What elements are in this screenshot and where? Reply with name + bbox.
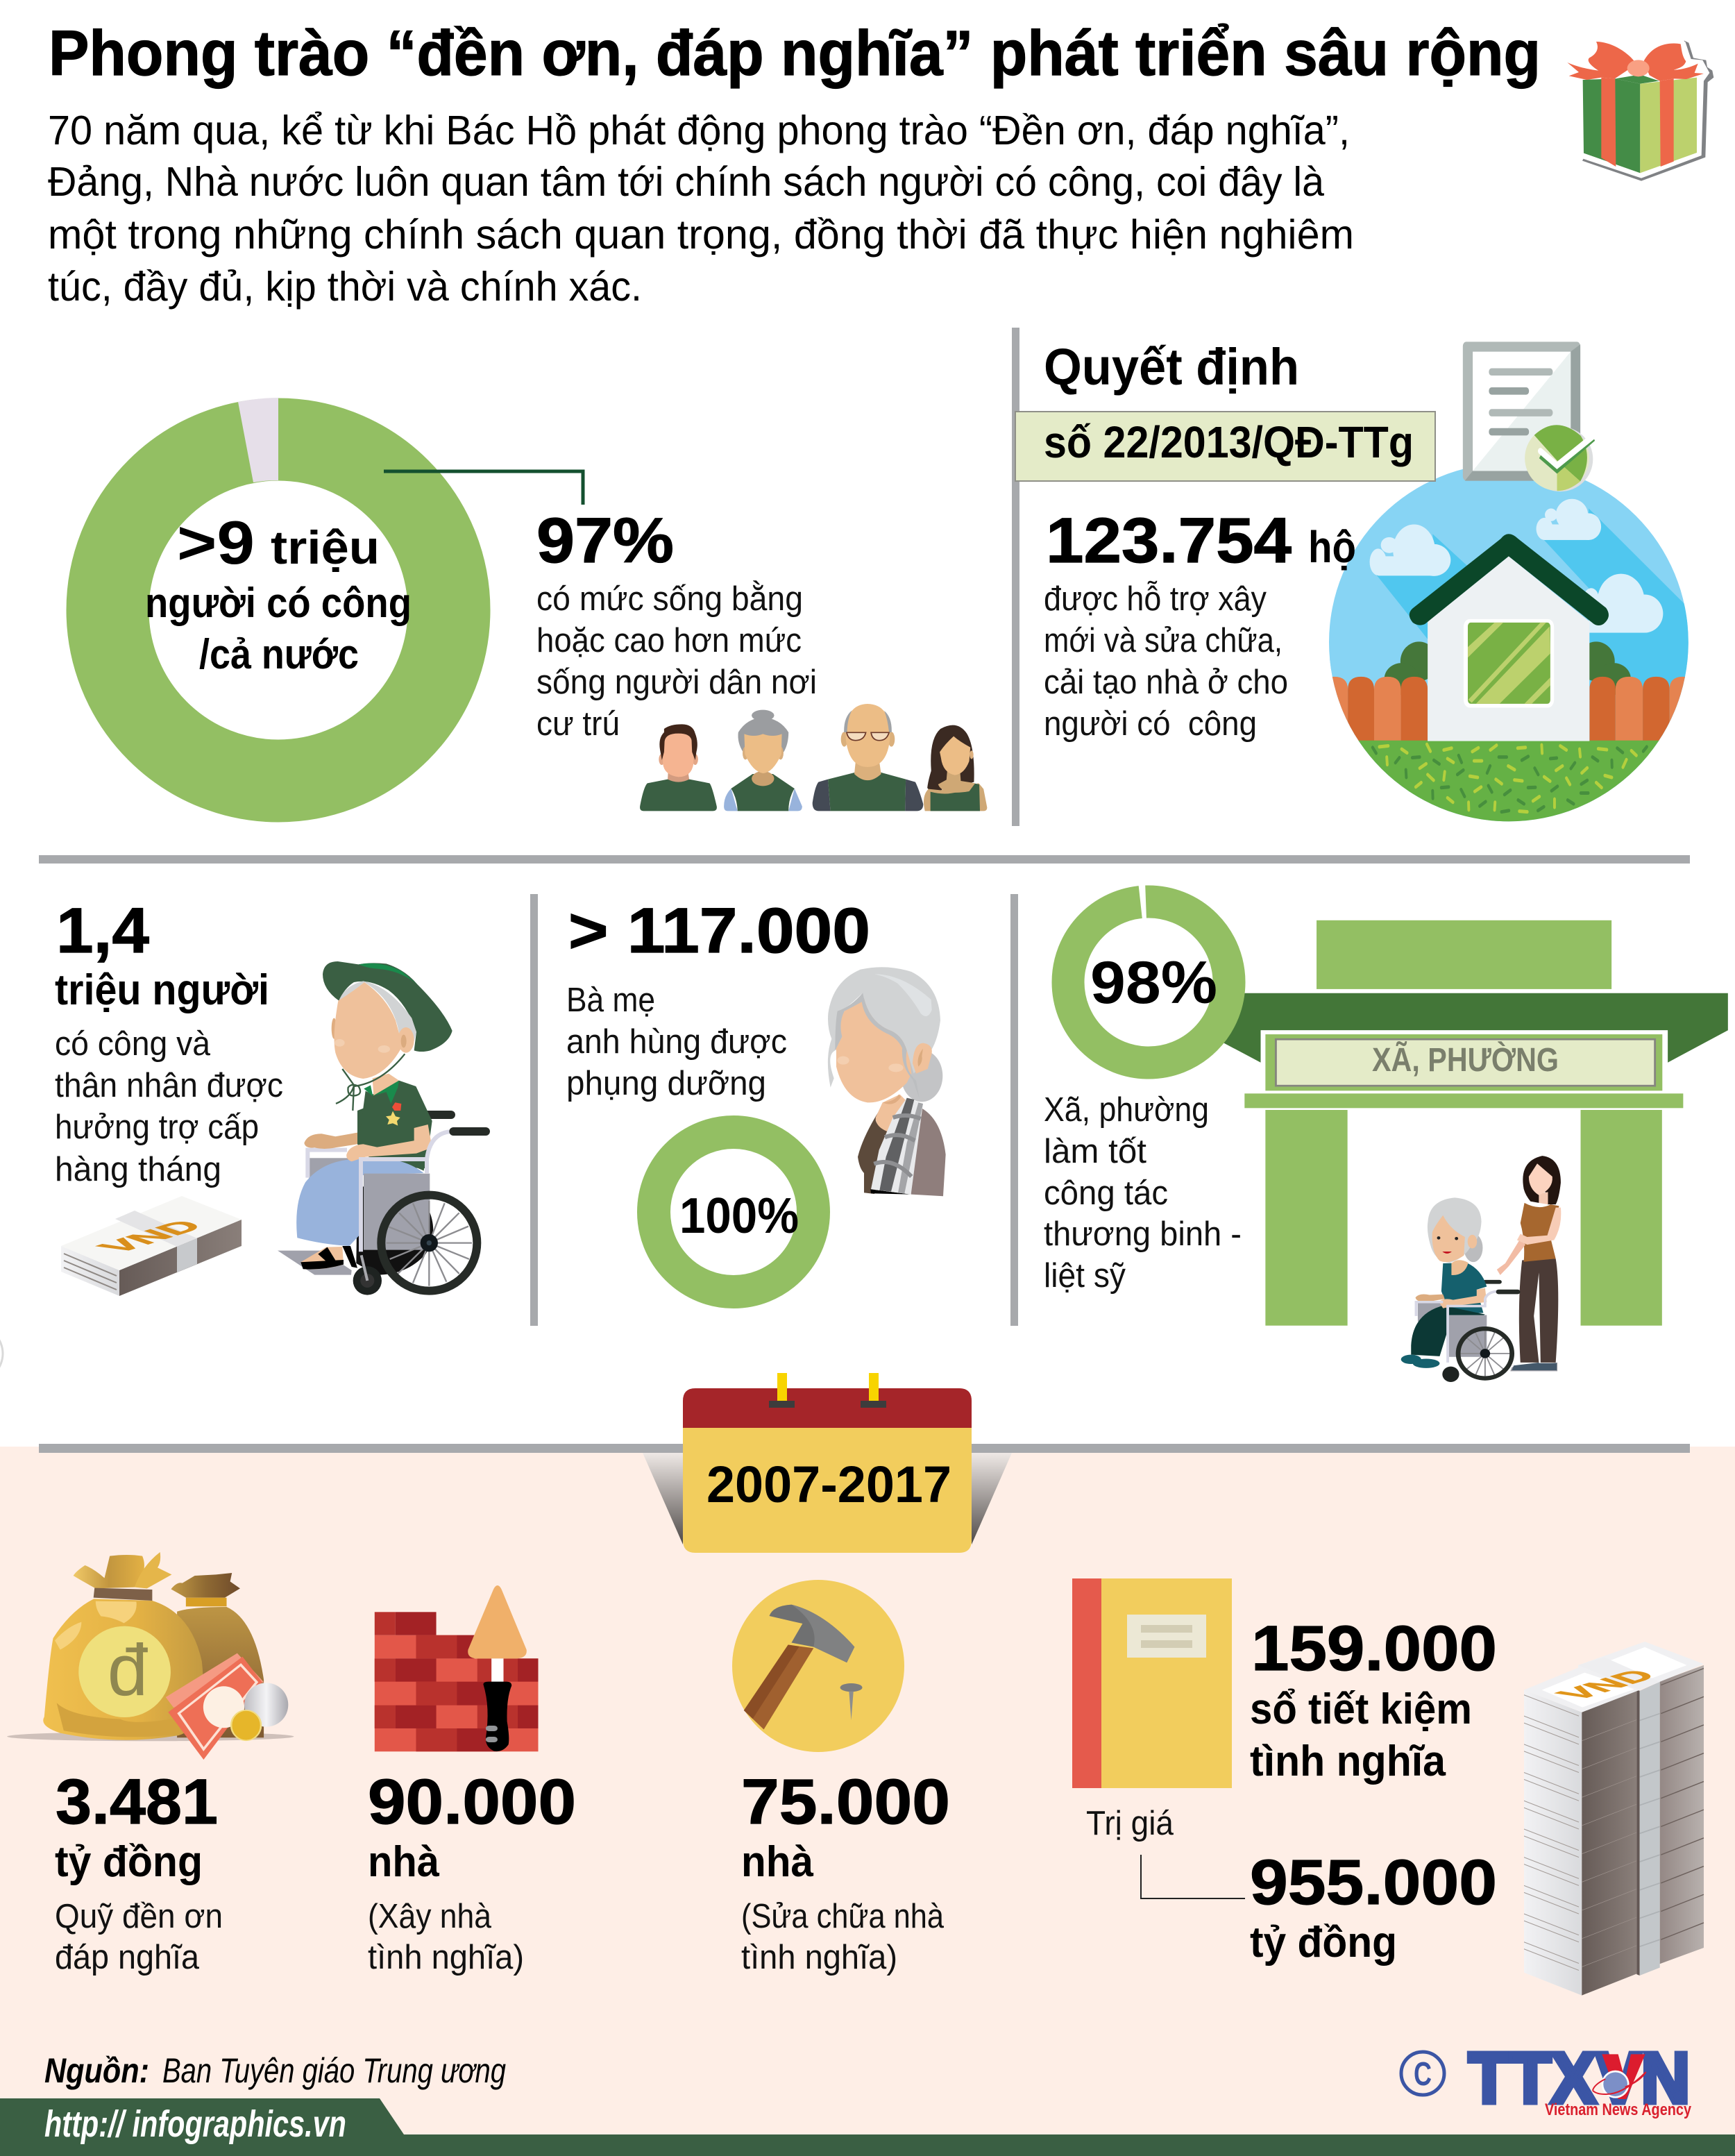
connector line (1141, 1855, 1245, 1898)
badge: decision number (1015, 412, 1435, 481)
allowance description: hưởng trợ cấp (55, 1109, 259, 1146)
panel: monthly allowance (55, 895, 486, 1296)
icon: tall VND banknote stack (1524, 1642, 1704, 1996)
stat description: sống người dân nơi (536, 664, 817, 701)
stat: households: 123.754 (1046, 505, 1292, 576)
illustration: veteran in wheelchair (278, 961, 486, 1295)
panel: new houses (368, 1585, 576, 1976)
intro text block: một trong những chính sách quan trọng, đồng thời đã thực hiện nghiêm (48, 212, 1354, 258)
households description (1044, 580, 1288, 743)
icon: document with check (1463, 342, 1593, 491)
stat unit: tỷ đồng (55, 1838, 203, 1886)
communes description: làm tốt (1044, 1133, 1146, 1170)
footer bar (0, 2098, 1735, 2156)
new houses description: tình nghĩa) (368, 1939, 524, 1976)
intro text block: 70 năm qua, kể từ khi Bác Hồ phát động phong trào “Đền ơn, đáp nghĩa”, (48, 108, 1350, 153)
panel: fund (7, 1552, 294, 1976)
panel: housing decision (1015, 338, 1705, 827)
divider (1010, 894, 1018, 1326)
stat unit: nhà (741, 1838, 813, 1886)
repair description: tình nghĩa) (741, 1939, 897, 1976)
mothers description: Bà mẹ (566, 982, 655, 1019)
fund description (55, 1898, 223, 1976)
allowance description: hàng tháng (55, 1151, 221, 1188)
mothers description (566, 982, 787, 1102)
icon: tall VND banknote stack: VND (1548, 1667, 1665, 1703)
icon: house in circle (1329, 469, 1689, 822)
panel: savings books (1072, 1578, 1704, 1996)
mothers description: phụng dưỡng (566, 1065, 766, 1102)
icon: money bags: đ (108, 1630, 149, 1711)
divider (39, 855, 1690, 864)
illustration: commune gate: XÃ, PHƯỜNG (1372, 1041, 1559, 1079)
donut label: 98 percent: 98% (1090, 950, 1217, 1016)
stat description: có mức sống bằng (536, 580, 803, 618)
new houses description: (Xây nhà (368, 1898, 492, 1935)
stat: households: hộ (1308, 522, 1356, 572)
allowance description (55, 1025, 283, 1188)
stat: 117.000: > 117.000 (568, 895, 870, 966)
icon: VND banknote bundle (61, 1196, 242, 1296)
stat unit: nhà (368, 1838, 439, 1886)
icon: savings book (1072, 1578, 1232, 1788)
divider (39, 1444, 1690, 1453)
logo: TTXVN: C (1414, 2056, 1432, 2093)
allowance description: thân nhân được (55, 1067, 283, 1104)
fund description: Quỹ đền ơn (55, 1898, 223, 1935)
donut chart: 100 percent (654, 1132, 813, 1292)
donut chart: 97 percent (108, 398, 449, 781)
donut center label: /cả nước (199, 631, 359, 677)
source: Nguồn: (44, 2051, 149, 2090)
stat unit: sổ tiết kiệm (1250, 1685, 1472, 1733)
panel: repaired houses (732, 1580, 950, 1976)
mothers description: anh hùng được (566, 1023, 787, 1061)
stat: 159.000: 159.000 (1251, 1613, 1497, 1684)
communes description: thương binh - (1044, 1215, 1242, 1253)
panel: heroic mothers (566, 895, 946, 1292)
logo: TTXVN: Vietnam News Agency (1545, 2100, 1692, 2119)
stat: 90.000: 90.000 (368, 1767, 576, 1837)
communes description: liệt sỹ (1044, 1257, 1126, 1295)
icon: gift box (1564, 37, 1713, 181)
intro text block: Đảng, Nhà nước luôn quan tâm tới chính sách người có công, coi đây là (48, 159, 1324, 205)
households description: mới và sửa chữa, (1044, 622, 1283, 659)
donut center label: người có công (145, 580, 412, 626)
stat unit: tình nghĩa (1250, 1737, 1446, 1785)
illustration: carer and woman in wheelchair (1401, 1156, 1561, 1382)
stat description: cư trú (536, 705, 620, 743)
source (44, 2051, 506, 2090)
footer bar: http:// infographics.vn (44, 2103, 346, 2145)
donut label: 100 percent: 100% (679, 1188, 799, 1244)
section: bottom background (0, 1447, 1735, 2156)
calendar: 2007-2017: 2007-2017 (706, 1456, 951, 1513)
icon: hammer and nail (732, 1580, 904, 1752)
donut center label: triệu (271, 521, 380, 574)
allowance description: có công và (55, 1025, 211, 1063)
calendar: 2007-2017 (643, 1373, 1012, 1553)
stat unit: triệu người (55, 966, 269, 1014)
leader line (384, 471, 583, 505)
new houses description (368, 1898, 524, 1976)
stat description (536, 580, 817, 743)
heading: decision: Quyết định (1044, 338, 1299, 396)
icon: money bags (7, 1552, 294, 1760)
divider (530, 894, 538, 1326)
donut center label (145, 508, 412, 677)
stat unit: tỷ đồng (1250, 1919, 1397, 1966)
donut center label: >9 (177, 508, 255, 577)
logo: TTXVN: TTXVN (1469, 2038, 1690, 2118)
fund description: đáp nghĩa (55, 1939, 200, 1976)
stat: 1.4 million: 1,4 (56, 895, 149, 966)
stat: 97 percent: 97% (536, 505, 674, 576)
label: value: Trị giá (1086, 1805, 1174, 1842)
stat: fund value: 3.481 (56, 1767, 218, 1837)
repair description (741, 1898, 945, 1976)
panel: people with merit (108, 398, 987, 811)
icon: four people (640, 704, 987, 811)
source: Ban Tuyên giáo Trung ương (162, 2051, 506, 2090)
badge: decision number: số 22/2013/QĐ-TTg (1044, 417, 1414, 467)
households description: cải tạo nhà ở cho (1044, 664, 1288, 701)
panel: communes (1044, 882, 1728, 1382)
illustration: elderly mother (828, 967, 946, 1196)
divider (1012, 328, 1019, 826)
households description: được hỗ trợ xây (1044, 580, 1267, 618)
icon: VND banknote bundle: VND (89, 1217, 212, 1256)
icon: brick wall and trowel (375, 1585, 539, 1751)
illustration: commune gate (1200, 920, 1728, 1326)
title: Phong trào “đền ơn, đáp nghĩa” phát triển sâu rộng (49, 18, 1541, 89)
stat unit (1250, 1685, 1472, 1785)
donut chart: 98 percent (1068, 882, 1229, 1063)
repair description: (Sửa chữa nhà (741, 1898, 945, 1935)
stat: 955.000: 955.000 (1250, 1847, 1497, 1918)
intro text block (48, 108, 1354, 310)
communes description: công tác (1044, 1174, 1168, 1212)
households description: người có công (1044, 705, 1257, 743)
stat: 75.000: 75.000 (741, 1767, 950, 1837)
stat description: hoặc cao hơn mức (536, 622, 802, 659)
intro text block: túc, đầy đủ, kịp thời và chính xác. (48, 264, 642, 310)
edge mark (0, 1326, 3, 1381)
communes description (1044, 1091, 1242, 1295)
communes description: Xã, phường (1044, 1091, 1209, 1129)
